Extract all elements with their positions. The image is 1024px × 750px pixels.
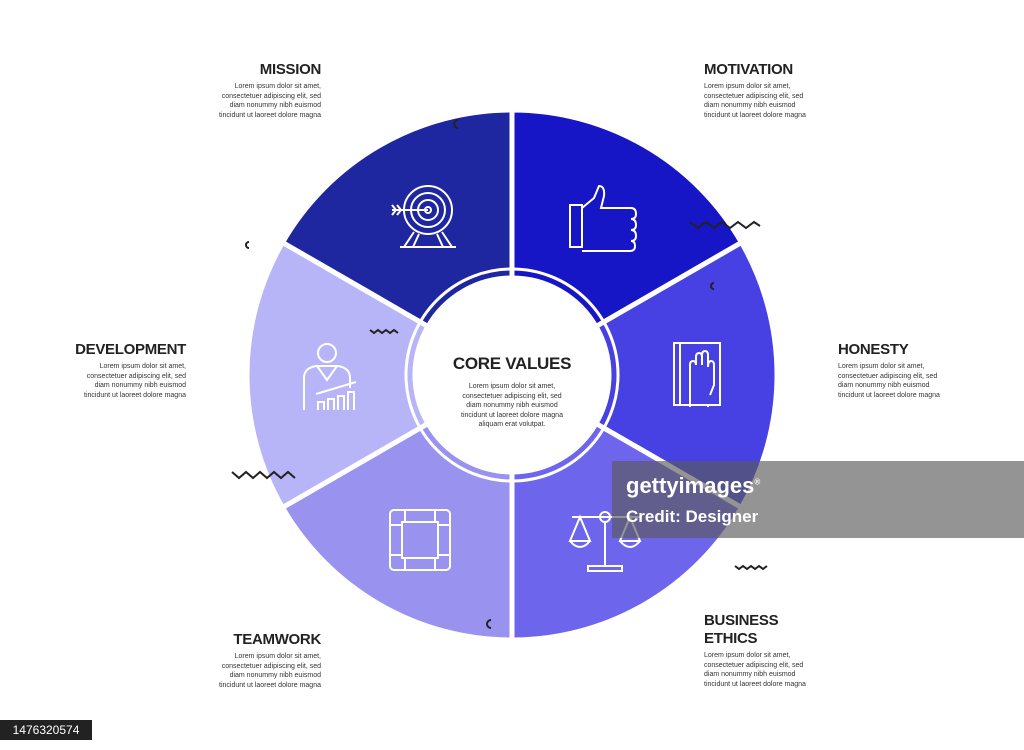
text block: business ethics: tincidunt ut laoreet dolore magna [704,680,806,688]
text block: development: Lorem ipsum dolor sit amet, [100,363,186,370]
text block: honesty: Lorem ipsum dolor sit amet, [838,363,924,370]
decorative squiggles [232,120,767,628]
text block: development: tincidunt ut laoreet dolore magna [84,392,186,398]
icon: thumbs up [570,186,636,251]
center text: core values: Lorem ipsum dolor sit amet, [469,383,555,390]
text block: teamwork: tincidunt ut laoreet dolore magna [219,682,321,688]
watermark overlay: Credit: Designer [626,507,758,526]
text block: development: diam nonummy nibh euismod [95,382,186,389]
text block: honesty: diam nonummy nibh euismod [838,382,929,389]
icon: target [392,186,456,247]
text block: development: consectetuer adipiscing elit, sed [87,372,186,380]
text block: teamwork: consectetuer adipiscing elit, sed [222,662,321,670]
text block: mission: Lorem ipsum dolor sit amet, [235,83,321,90]
text block: motivation: tincidunt ut laoreet dolore magna [704,112,806,118]
text block: development: DEVELOPMENT [75,341,186,358]
text block: honesty: tincidunt ut laoreet dolore magna [838,392,940,398]
text block: honesty: HONESTY [838,341,908,358]
watermark overlay [612,461,1024,538]
text block: mission: MISSION [260,61,321,78]
text block: teamwork: diam nonummy nibh euismod [230,672,321,679]
text block: motivation: MOTIVATION [704,61,793,78]
text block: mission: diam nonummy nibh euismod [230,102,321,109]
center text: core values: CORE VALUES [453,354,571,373]
icon: teamwork hands [390,510,450,570]
text block: mission [219,61,321,118]
text block: business ethics [704,612,806,688]
segment: teamwork [282,424,512,640]
text block: business ethics: diam nonummy nibh euismod [704,671,795,678]
center text: core values: tincidunt ut laoreet dolore magna [461,412,563,418]
text block: business ethics: BUSINESS [704,612,778,629]
text block: motivation: consectetuer adipiscing elit, sed [704,92,803,100]
text block: motivation: Lorem ipsum dolor sit amet, [704,83,790,90]
text block: development [75,341,186,398]
segment: motivation [512,110,742,326]
text block: mission: tincidunt ut laoreet dolore magna [219,112,321,118]
icon: scales [570,512,640,571]
text block: honesty: consectetuer adipiscing elit, sed [838,372,937,380]
text block: motivation [704,61,806,118]
icon: book with hand [674,343,720,407]
text block: teamwork [219,631,322,688]
center text: core values: consectetuer adipiscing elit, sed [462,392,562,400]
icon: person with chart [304,344,356,410]
segment: mission [282,110,512,326]
text block: honesty [838,341,940,398]
image id: 1476320574 [13,723,79,737]
center text: core values: diam nonummy nibh euismod [466,402,558,409]
segment: honesty [596,242,777,508]
text block: business ethics: consectetuer adipiscing elit, sed [704,662,803,668]
text block: business ethics: Lorem ipsum dolor sit amet, [704,652,790,659]
text block: mission: consectetuer adipiscing elit, sed [222,92,321,100]
segment: development [247,242,428,508]
segment: business ethics [512,424,742,640]
center text: core values [453,354,571,428]
text block: business ethics: ETHICS [704,630,757,647]
watermark overlay: gettyimages® [626,473,760,498]
center text: core values: aliquam erat volutpat. [479,421,545,428]
text block: teamwork: Lorem ipsum dolor sit amet, [235,653,321,660]
image id [0,720,92,740]
text block: motivation: diam nonummy nibh euismod [704,102,795,109]
text block: teamwork: TEAMWORK [233,631,321,648]
